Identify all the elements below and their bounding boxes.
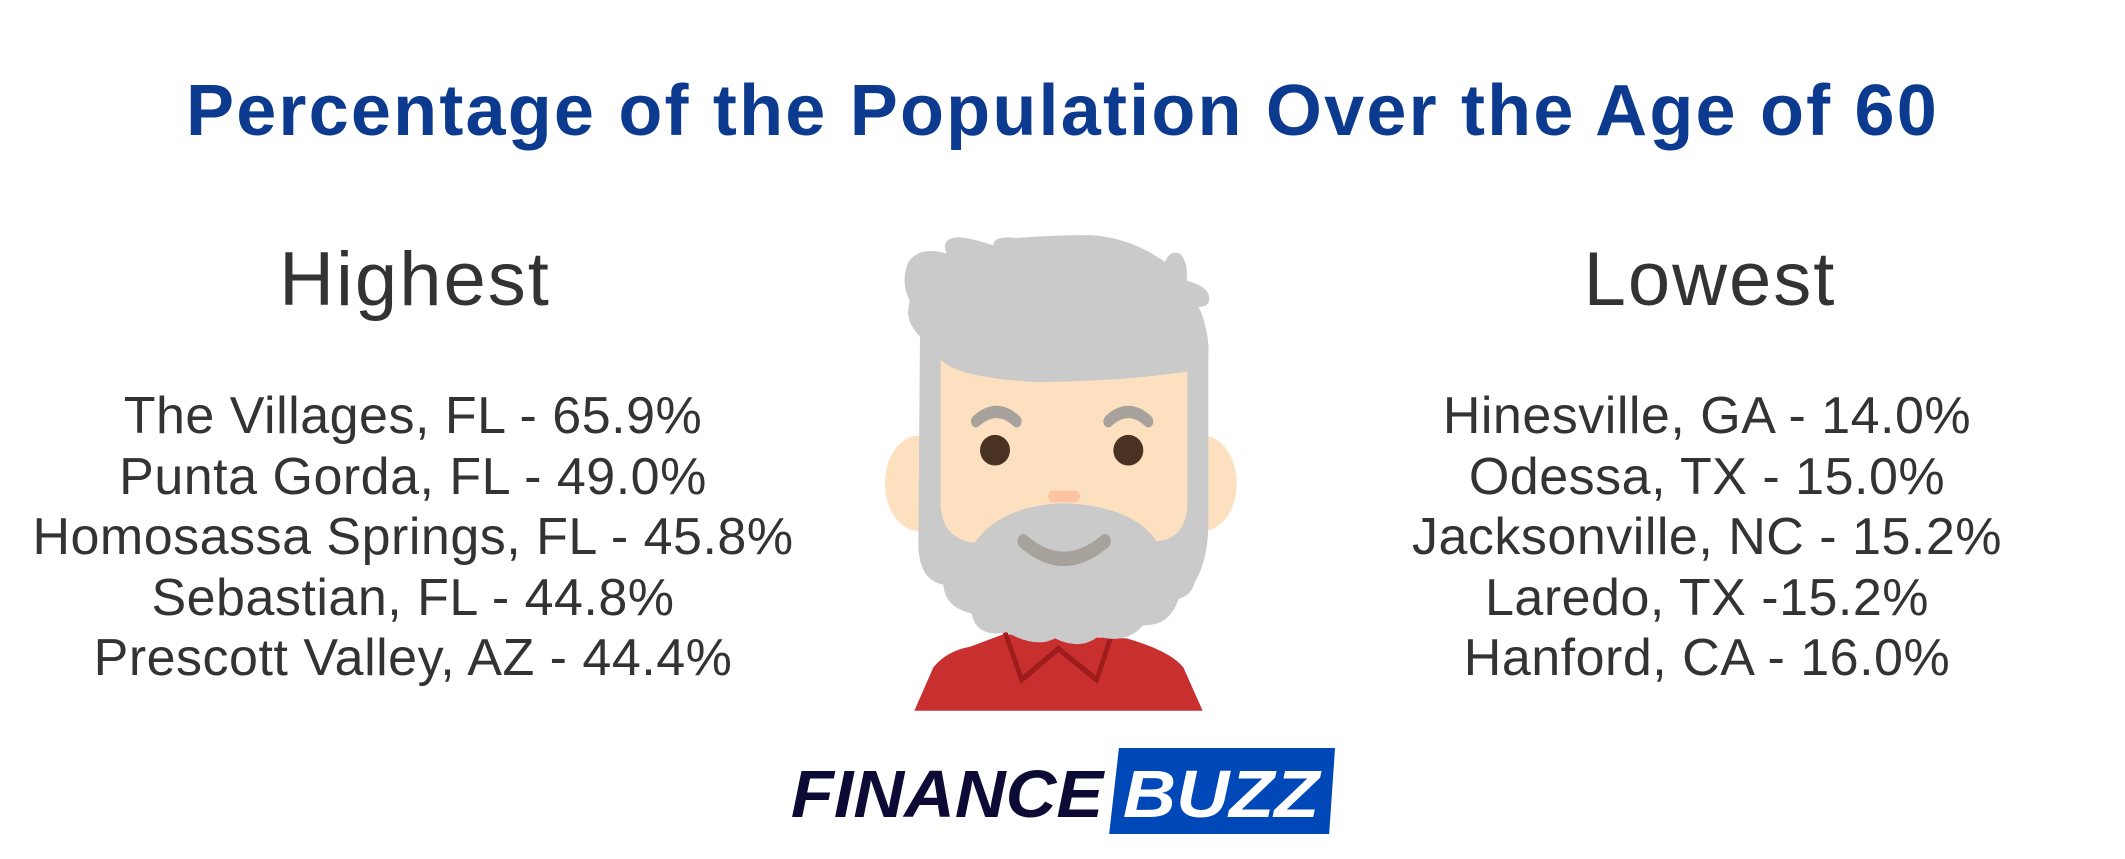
list: lowest: Odessa, TX - 15.0%: [1469, 448, 1945, 506]
face: [941, 359, 1187, 542]
ears: [885, 436, 1237, 531]
hair top: [905, 235, 1209, 382]
eyebrows: [976, 412, 1148, 421]
list: highest: Punta Gorda, FL - 49.0%: [119, 448, 707, 506]
list: lowest: Hanford, CA - 16.0%: [1464, 629, 1950, 687]
heading: lowest: Lowest: [1584, 237, 1836, 322]
shirt: [914, 632, 1203, 711]
mouth: [1023, 541, 1105, 559]
list: highest: Sebastian, FL - 44.8%: [151, 568, 675, 626]
logo: FinanceBuzz: [791, 748, 1335, 834]
logo text FINANCE: FINANCE: [791, 756, 1106, 831]
heading: highest: Highest: [279, 237, 551, 322]
list: highest: The Villages, FL - 65.9%: [124, 387, 702, 445]
nose: [1048, 491, 1080, 502]
list: highest: Prescott Valley, AZ - 44.4%: [94, 629, 732, 687]
list: lowest: Hinesville, GA - 14.0%: [1443, 387, 1971, 445]
list: highest: Homosassa Springs, FL - 45.8%: [32, 508, 794, 566]
list: lowest: Jacksonville, NC - 15.2%: [1412, 508, 2002, 566]
illustration: old man: [885, 235, 1237, 711]
list: lowest: Laredo, TX -15.2%: [1485, 568, 1929, 626]
beard: [921, 503, 1197, 644]
list: lowest: [1412, 387, 2002, 687]
hair sides: [918, 303, 1208, 597]
list: highest: [32, 387, 794, 687]
eyes: [980, 435, 1143, 466]
logo badge BUZZ: [1109, 748, 1335, 834]
logo badge BUZZ: BUZZ: [1123, 756, 1322, 831]
title: Percentage of the Population Over the Age of 60: [186, 71, 1939, 151]
